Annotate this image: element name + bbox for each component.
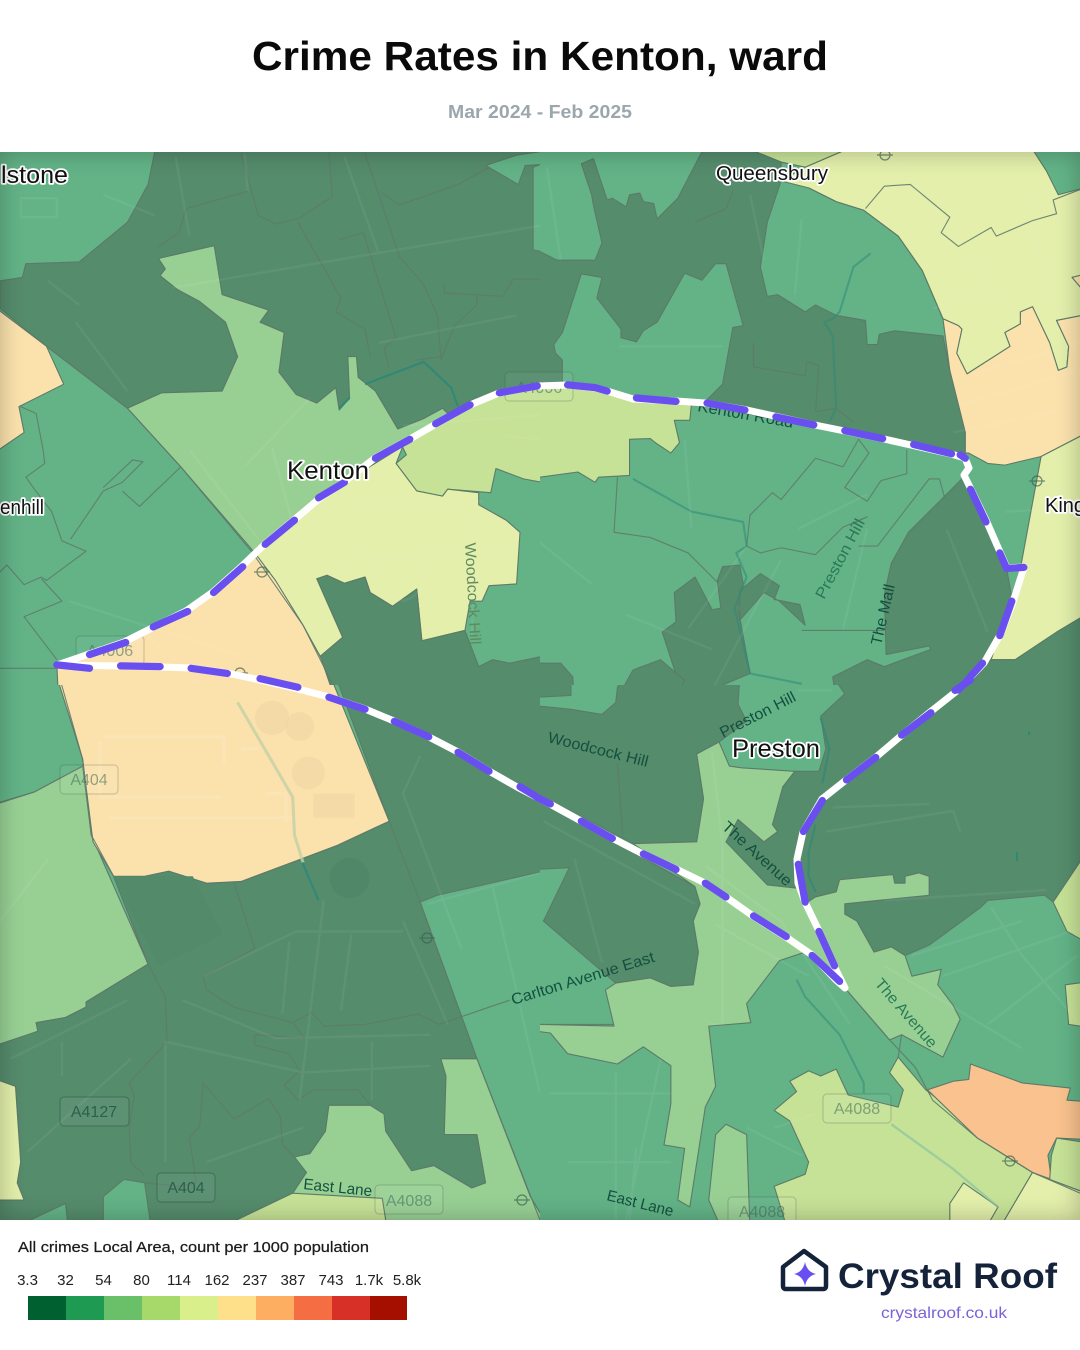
road label: Woodcock Hill: Woodcock Hill: [546, 729, 650, 771]
route shield: A4088 bottom: [728, 1196, 796, 1220]
route shield: A4088 south: [375, 1185, 443, 1214]
road label: The Avenue south: The Avenue: [871, 975, 940, 1052]
icon: house with star: [783, 1251, 826, 1289]
ward boundary: white line: [57, 385, 1024, 988]
legend scale values: 5.8k: [393, 1272, 422, 1289]
route shield: A4006 north: [505, 372, 573, 401]
route shield: A4088 south: A4088: [386, 1193, 432, 1210]
logo wordmark: Crystal Roof: [838, 1257, 1057, 1296]
road label: Woodcock Hill vertical: Woodcock Hill: [461, 542, 483, 645]
subtitle: date range: Mar 2024 - Feb 2025: [448, 102, 632, 122]
place label: Queensbury: Queensbury: [716, 163, 828, 185]
route shield: A404 west: A404: [70, 772, 108, 789]
legend scale values: 387: [280, 1272, 306, 1289]
legend scale values: 54: [95, 1272, 112, 1289]
title: Crime Rates in Kenton, ward: [252, 33, 828, 79]
map quadrant: north-west: [0, 150, 551, 701]
legend colour bar: [28, 1296, 407, 1320]
legend scale values: 114: [167, 1272, 191, 1289]
legend scale values: 32: [57, 1272, 74, 1289]
route shield: A4088 east: [823, 1094, 891, 1123]
road label: Kenton Road: Kenton Road: [696, 398, 795, 432]
route shield: A4127: [60, 1097, 129, 1126]
route shield: A404 south: A404: [167, 1180, 205, 1197]
logo: Crystal Roof: [783, 1251, 1057, 1322]
legend scale values: [17, 1272, 422, 1289]
route shield: A404 west: [60, 765, 118, 794]
legend: [17, 1239, 422, 1320]
legend scale values: 162: [204, 1272, 230, 1289]
underground station symbols: [232, 150, 1045, 1205]
road label: Carlton Avenue East: Carlton Avenue East: [509, 949, 657, 1009]
route shield: A4006 north: A4006: [516, 380, 562, 397]
road label: Preston Hill upper: Preston Hill: [813, 516, 869, 602]
place label: Preston: Preston: [732, 735, 820, 763]
route shield: A4088 bottom: A4088: [739, 1204, 785, 1221]
map quadrant: north-east: [537, 147, 1080, 701]
route shield: A4006 west: A4006: [87, 643, 133, 660]
website url: crystalroof.co.uk: [881, 1305, 1008, 1322]
road label: East Lane west: East Lane: [303, 1176, 373, 1200]
legend heading: All crimes Local Area, count per 1000 population: [18, 1239, 369, 1256]
legend scale values: 743: [318, 1272, 344, 1289]
place label: Belmont/Stanmore fragment: enhill: [0, 497, 44, 519]
legend scale values: 80: [133, 1272, 150, 1289]
route shield: A4088 east: A4088: [834, 1101, 880, 1118]
legend scale values: 237: [242, 1272, 268, 1289]
road label: The Avenue north: The Avenue: [718, 818, 795, 890]
route shield: A4006 west: [76, 636, 144, 665]
place label: Wealdstone (cropped): lstone: [1, 162, 68, 189]
road label: Preston Hill lower: Preston Hill: [717, 689, 799, 742]
route shield: A404 south: [157, 1173, 215, 1202]
map quadrant: south-west: [0, 677, 551, 1231]
place label: Kenton: Kenton: [287, 457, 369, 485]
route shield: A4127: A4127: [71, 1104, 117, 1121]
legend scale values: 1.7k: [355, 1272, 384, 1289]
legend scale values: 3.3: [17, 1272, 38, 1289]
map quadrant: south-east: [537, 677, 1080, 1231]
road label: The Mall: The Mall: [868, 583, 899, 647]
ward boundary: purple dashes: [57, 385, 1024, 981]
road label: East Lane east: East Lane: [605, 1187, 675, 1220]
